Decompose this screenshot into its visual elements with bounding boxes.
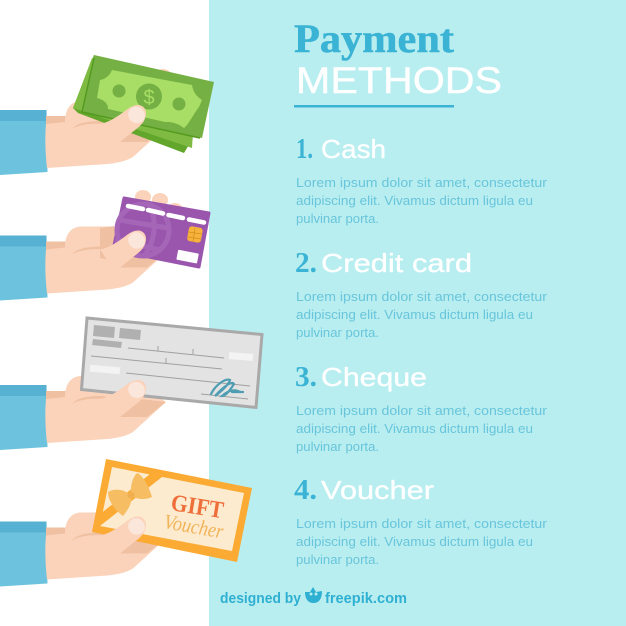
section 2: credit card: Credit card	[321, 248, 472, 278]
background panel	[209, 0, 626, 626]
section 4: voucher: 4.	[294, 475, 317, 506]
section 2: credit card: adipiscing elit. Vivamus dictum ligula eu	[296, 308, 533, 322]
illustration: hand holding gift voucher	[0, 459, 252, 586]
illustration: hand holding credit card	[0, 190, 209, 300]
footer credit	[220, 587, 407, 607]
section 4: voucher	[294, 475, 547, 567]
title: METHODS	[296, 60, 502, 101]
section 1: cash: pulvinar porta.	[296, 212, 379, 226]
section 1: cash: 1.	[296, 134, 313, 165]
section 4: voucher: Lorem ipsum dolor sit amet, consectetur	[296, 517, 547, 531]
section 3: cheque: Lorem ipsum dolor sit amet, consectetur	[296, 404, 547, 418]
illustration: hand holding gift voucher: GIFT	[169, 490, 225, 524]
section 2: credit card: pulvinar porta.	[296, 326, 379, 340]
illustration: hand holding cheque	[0, 318, 262, 450]
section 3: cheque: pulvinar porta.	[296, 440, 379, 454]
section 3: cheque	[295, 362, 547, 454]
footer credit: designed by	[220, 591, 301, 607]
section 3: cheque: 3.	[295, 362, 317, 393]
section 4: voucher: Voucher	[321, 475, 434, 505]
footer credit: freepik.com	[325, 591, 407, 607]
section 1: cash	[296, 134, 547, 226]
illustration: hand holding cash	[0, 55, 214, 175]
illustration: hand holding cash: $	[143, 87, 155, 109]
section 1: cash: adipiscing elit. Vivamus dictum ligula eu	[296, 194, 533, 208]
section 3: cheque: adipiscing elit. Vivamus dictum ligula eu	[296, 422, 533, 436]
title: Payment	[294, 16, 455, 61]
title	[294, 16, 502, 108]
section 2: credit card: 2.	[295, 248, 317, 279]
section 2: credit card	[295, 248, 547, 340]
section 2: credit card: Lorem ipsum dolor sit amet, consectetur	[296, 290, 547, 304]
illustration: hand holding gift voucher: Voucher	[162, 509, 226, 543]
section 1: cash: Lorem ipsum dolor sit amet, consectetur	[296, 176, 547, 190]
section 4: voucher: adipiscing elit. Vivamus dictum ligula eu	[296, 535, 533, 549]
section 4: voucher: pulvinar porta.	[296, 553, 379, 567]
section 3: cheque: Cheque	[321, 362, 427, 392]
section 1: cash: Cash	[321, 134, 386, 164]
